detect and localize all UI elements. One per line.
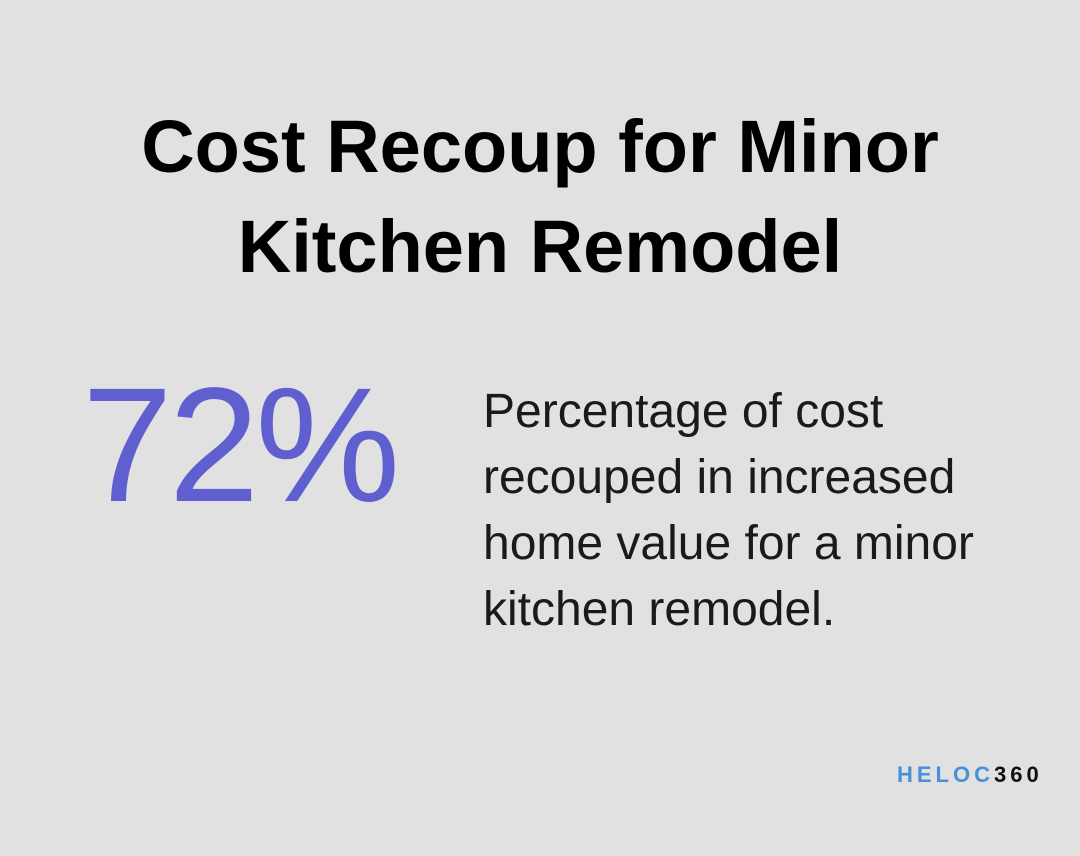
- description: recouped in increased: [483, 451, 955, 504]
- logo: HELOC360: [897, 762, 1043, 787]
- description: [483, 385, 974, 636]
- description: kitchen remodel.: [483, 583, 835, 636]
- title: Kitchen Remodel: [238, 205, 842, 288]
- description: home value for a minor: [483, 517, 974, 570]
- title: [141, 105, 939, 288]
- big stat: 72%: [82, 353, 396, 536]
- title: Cost Recoup for Minor: [141, 105, 939, 188]
- description: Percentage of cost: [483, 385, 883, 438]
